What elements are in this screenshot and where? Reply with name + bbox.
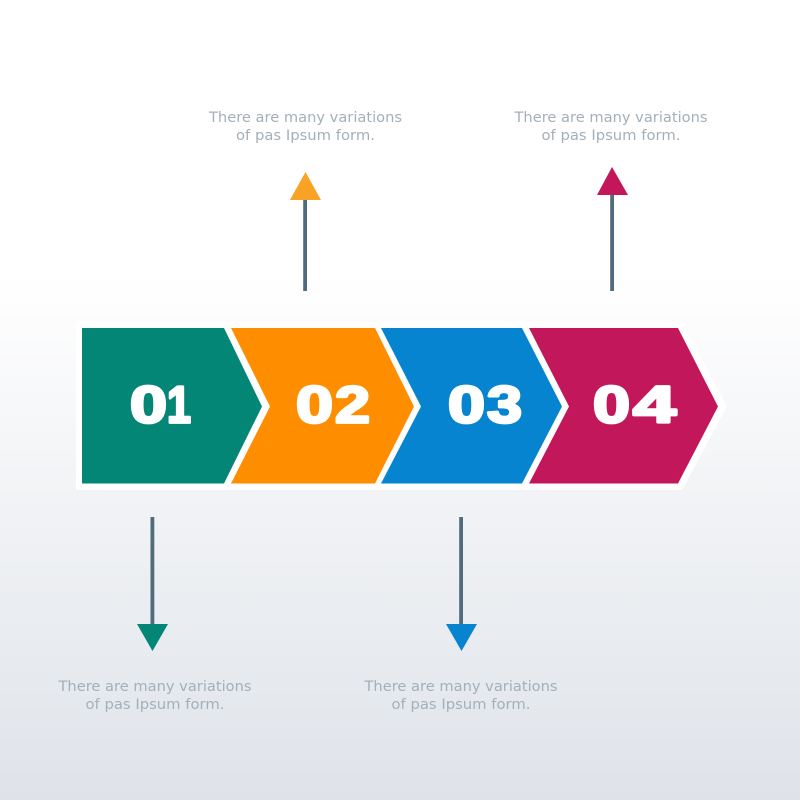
segment 02: 2 [335,376,370,434]
segment 04: 0 [593,376,630,434]
segment 04: 4 [633,376,676,434]
segment 03: 3 [487,376,522,434]
segment 02 [231,328,414,484]
arrow up: step 02 [290,172,321,291]
segment 01: 1 [167,376,191,434]
caption: step 01 [57,679,251,713]
caption: step 03 [363,679,558,713]
segment 01: 0 [130,376,167,434]
segment 04 [529,328,718,484]
caption: step 03: There are many variations [363,679,558,695]
caption: step 01: of pas Ipsum form. [86,697,224,713]
caption: step 04 [513,110,708,144]
arrow down: step 03 [446,517,477,651]
chevron arrow band [82,328,718,484]
caption: step 02: of pas Ipsum form. [236,128,375,144]
caption: step 02: There are many variations [208,110,402,126]
segment 02: 0 [296,376,333,434]
segment 01 [82,328,262,484]
caption: step 04: There are many variations [513,110,708,126]
segment 03: 0 [448,376,485,434]
segment 03 [381,328,562,484]
caption: step 04: of pas Ipsum form. [542,128,680,144]
arrow up: step 04 [597,167,628,291]
white arrow outline [76,322,727,490]
caption: step 03: of pas Ipsum form. [392,697,530,713]
caption: step 01: There are many variations [57,679,251,695]
caption: step 02 [208,110,402,144]
arrow down: step 01 [137,517,168,651]
